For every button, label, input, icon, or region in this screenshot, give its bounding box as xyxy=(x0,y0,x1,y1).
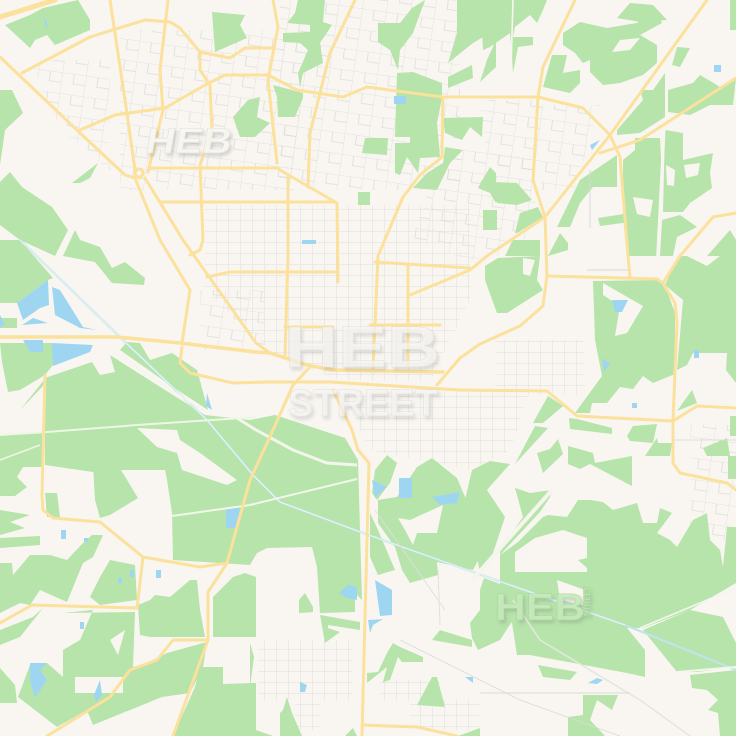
watermark: center: STREET xyxy=(288,383,438,425)
watermark: lower right: HEB xyxy=(495,587,585,629)
watermark: upper left: HEB xyxy=(143,120,236,161)
watermark: lower right: STREET xyxy=(582,586,592,616)
watermark: center: HEB xyxy=(285,315,440,380)
cleared land inside green areas xyxy=(75,38,700,693)
watermark: center xyxy=(285,315,440,425)
traffic circle xyxy=(135,169,143,177)
